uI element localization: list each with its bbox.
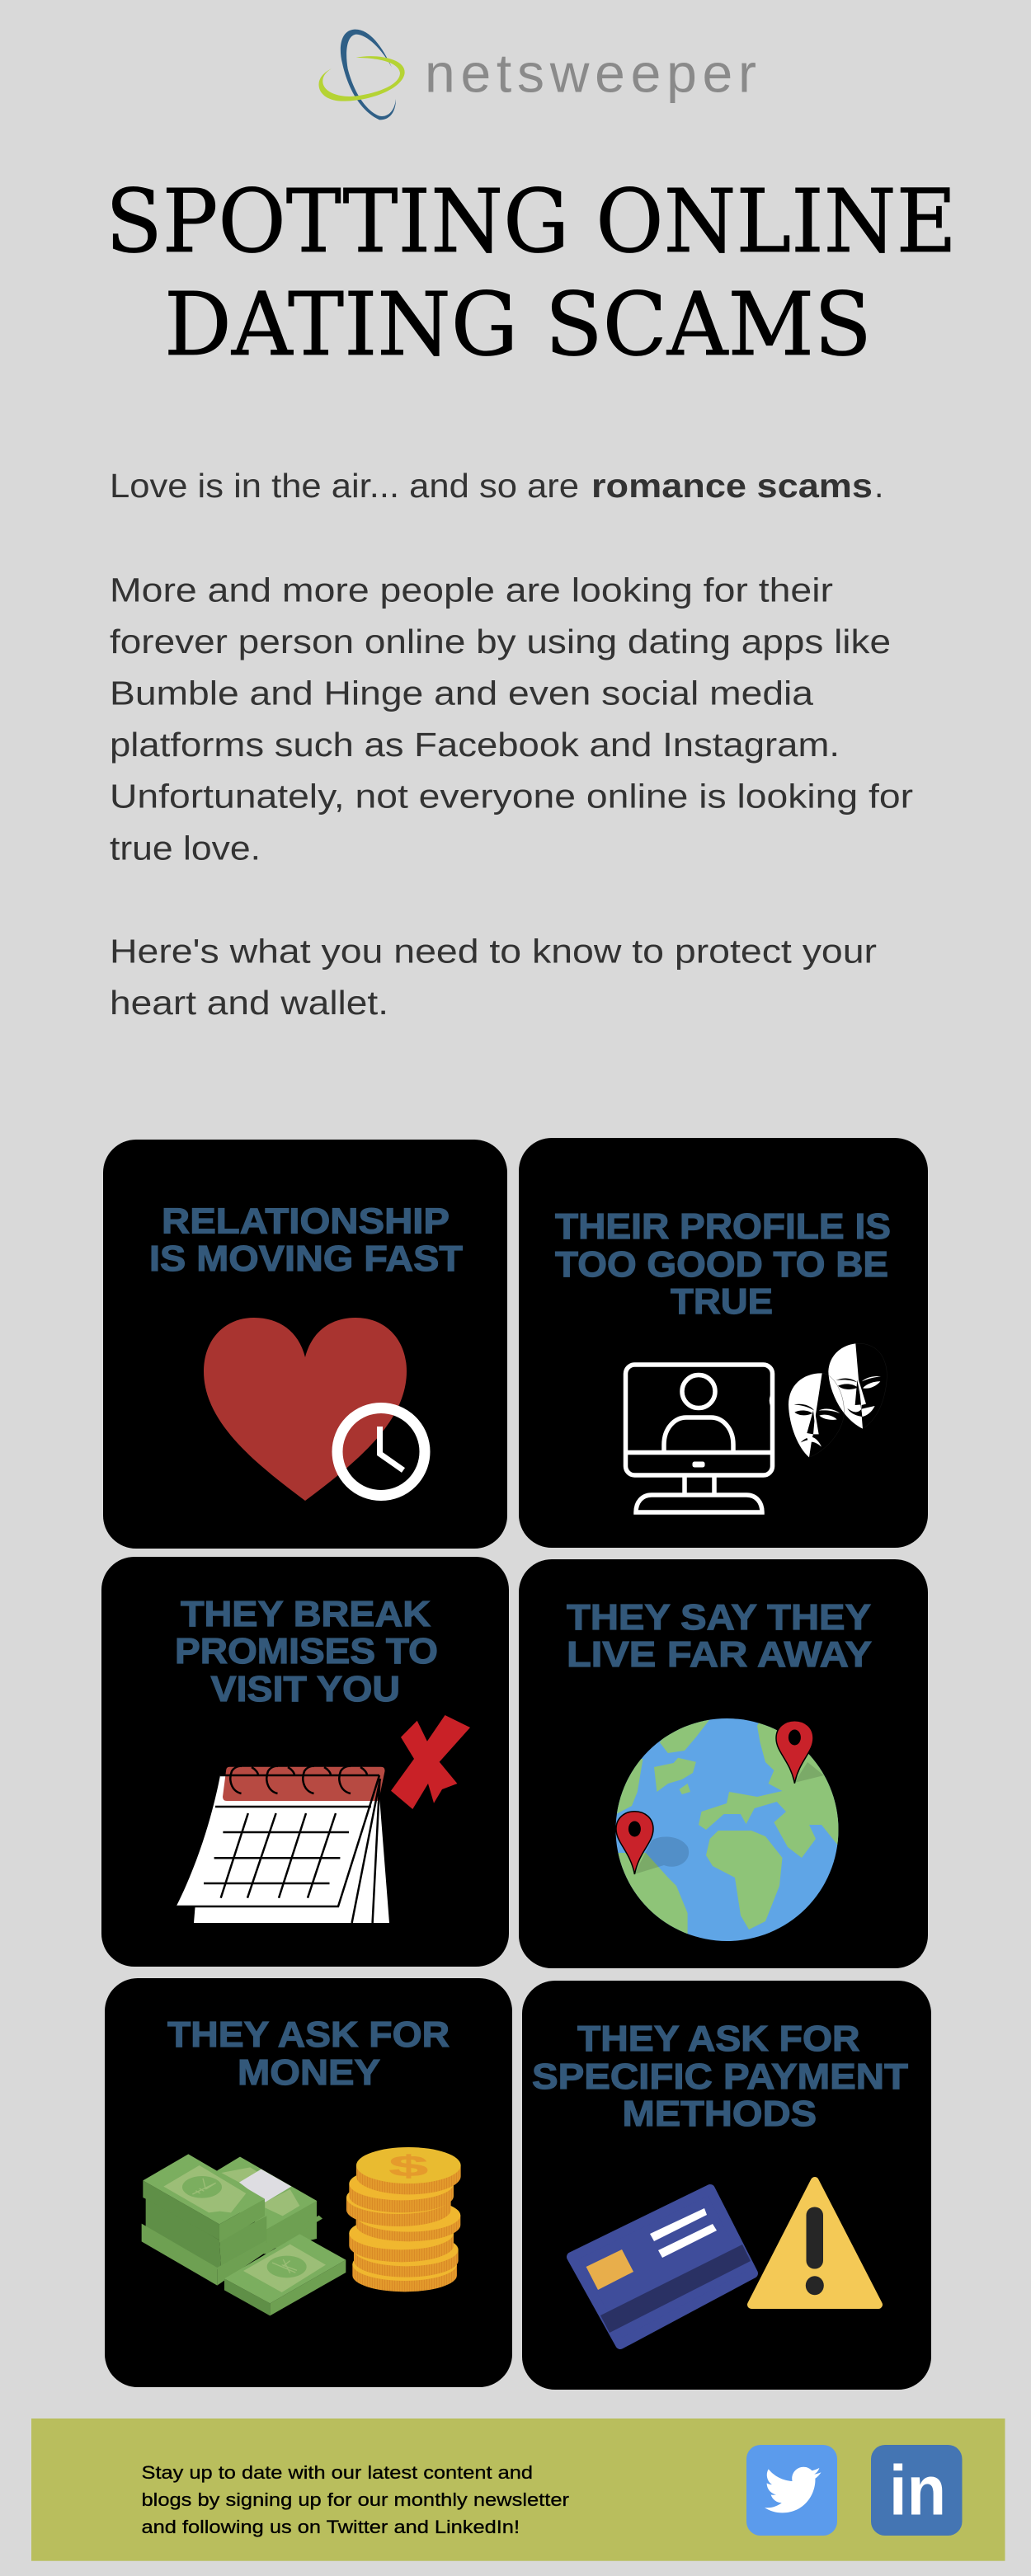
heading [175,1594,438,1709]
right mask features [836,1378,862,1405]
footer text: and following us on Twitter and LinkedIn! [142,2517,520,2537]
panel: profile too good to be true [519,1138,928,1548]
title [106,171,957,375]
logo wordmark: netsweeper [425,43,756,104]
footer text [142,2462,569,2537]
heading: RELATIONSHIP [162,1201,450,1242]
footer band [31,2419,1005,2561]
icon: theatre masks [789,1343,887,1457]
icon: clock [337,1408,425,1496]
icon: money stacks [142,2154,346,2315]
icon: orbit mark [319,30,405,120]
panel: specific payment methods [522,1981,931,2390]
icon: linkedin [871,2445,962,2536]
heading [567,1597,872,1675]
heading [167,2014,450,2093]
intro text block: Unfortunately, not everyone online is looking for [110,777,913,815]
intro text block: forever person online by using dating apps like [110,623,891,660]
icon: computer monitor with person [625,1365,774,1512]
footer text: Stay up to date with our latest content and [142,2462,533,2483]
intro text block: romance scams [591,467,873,505]
icon: map pin [776,1721,813,1784]
intro text block [110,467,913,1022]
intro text block: Love is in the air... and so are [110,467,579,505]
heading: METHODS [622,2094,817,2134]
heading: THEY ASK FOR [577,2019,859,2059]
icon: linkedin: in [889,2452,946,2530]
heading [532,2019,908,2134]
heading: PROMISES TO [175,1631,438,1671]
intro text block: . [874,467,883,505]
heading [149,1201,463,1279]
icon: coin stack [346,2147,461,2292]
title: DATING SCAMS [164,274,872,375]
heading: LIVE FAR AWAY [567,1634,872,1675]
left mask features [794,1404,816,1442]
intro text block: More and more people are looking for their [110,571,833,609]
title: SPOTTING ONLINE [106,171,957,272]
icon: globe [615,1718,838,1941]
icon: credit card [572,2189,753,2344]
heading: THEY SAY THEY [567,1597,871,1638]
logo: netsweeper [319,30,756,120]
icon: calendar [177,1766,389,1923]
panel: they ask for money [105,1978,512,2387]
heading: THEY ASK FOR [167,2014,450,2055]
heading: IS MOVING FAST [149,1239,463,1279]
intro text block: heart and wallet. [110,984,388,1022]
heading: THEIR PROFILE IS [555,1206,891,1247]
icon: twitter [746,2445,837,2536]
intro text block: platforms such as Facebook and Instagram. [110,726,840,764]
heading: THEY BREAK [181,1594,431,1634]
panel: relationship is moving fast [103,1140,507,1549]
icon: map pin [616,1812,653,1874]
intro text block: Here's what you need to know to protect your [110,932,877,970]
heading: VISIT YOU [211,1669,400,1709]
icon: red X [391,1715,470,1809]
panel: they live far away [519,1559,928,1968]
panel: they break promises [101,1557,509,1967]
heading: TOO GOOD TO BE [555,1244,888,1285]
heading: TRUE [671,1281,773,1322]
heading: MONEY [238,2052,380,2093]
icon: heart [204,1318,407,1501]
heading: SPECIFIC PAYMENT [532,2057,908,2097]
intro text block: true love. [110,830,261,867]
heading [555,1206,891,1322]
dollar sign: $ [389,2150,428,2183]
icon: warning triangle [751,2181,878,2305]
footer text: blogs by signing up for our monthly newsletter [142,2489,569,2510]
intro text block: Bumble and Hinge and even social media [110,675,813,712]
